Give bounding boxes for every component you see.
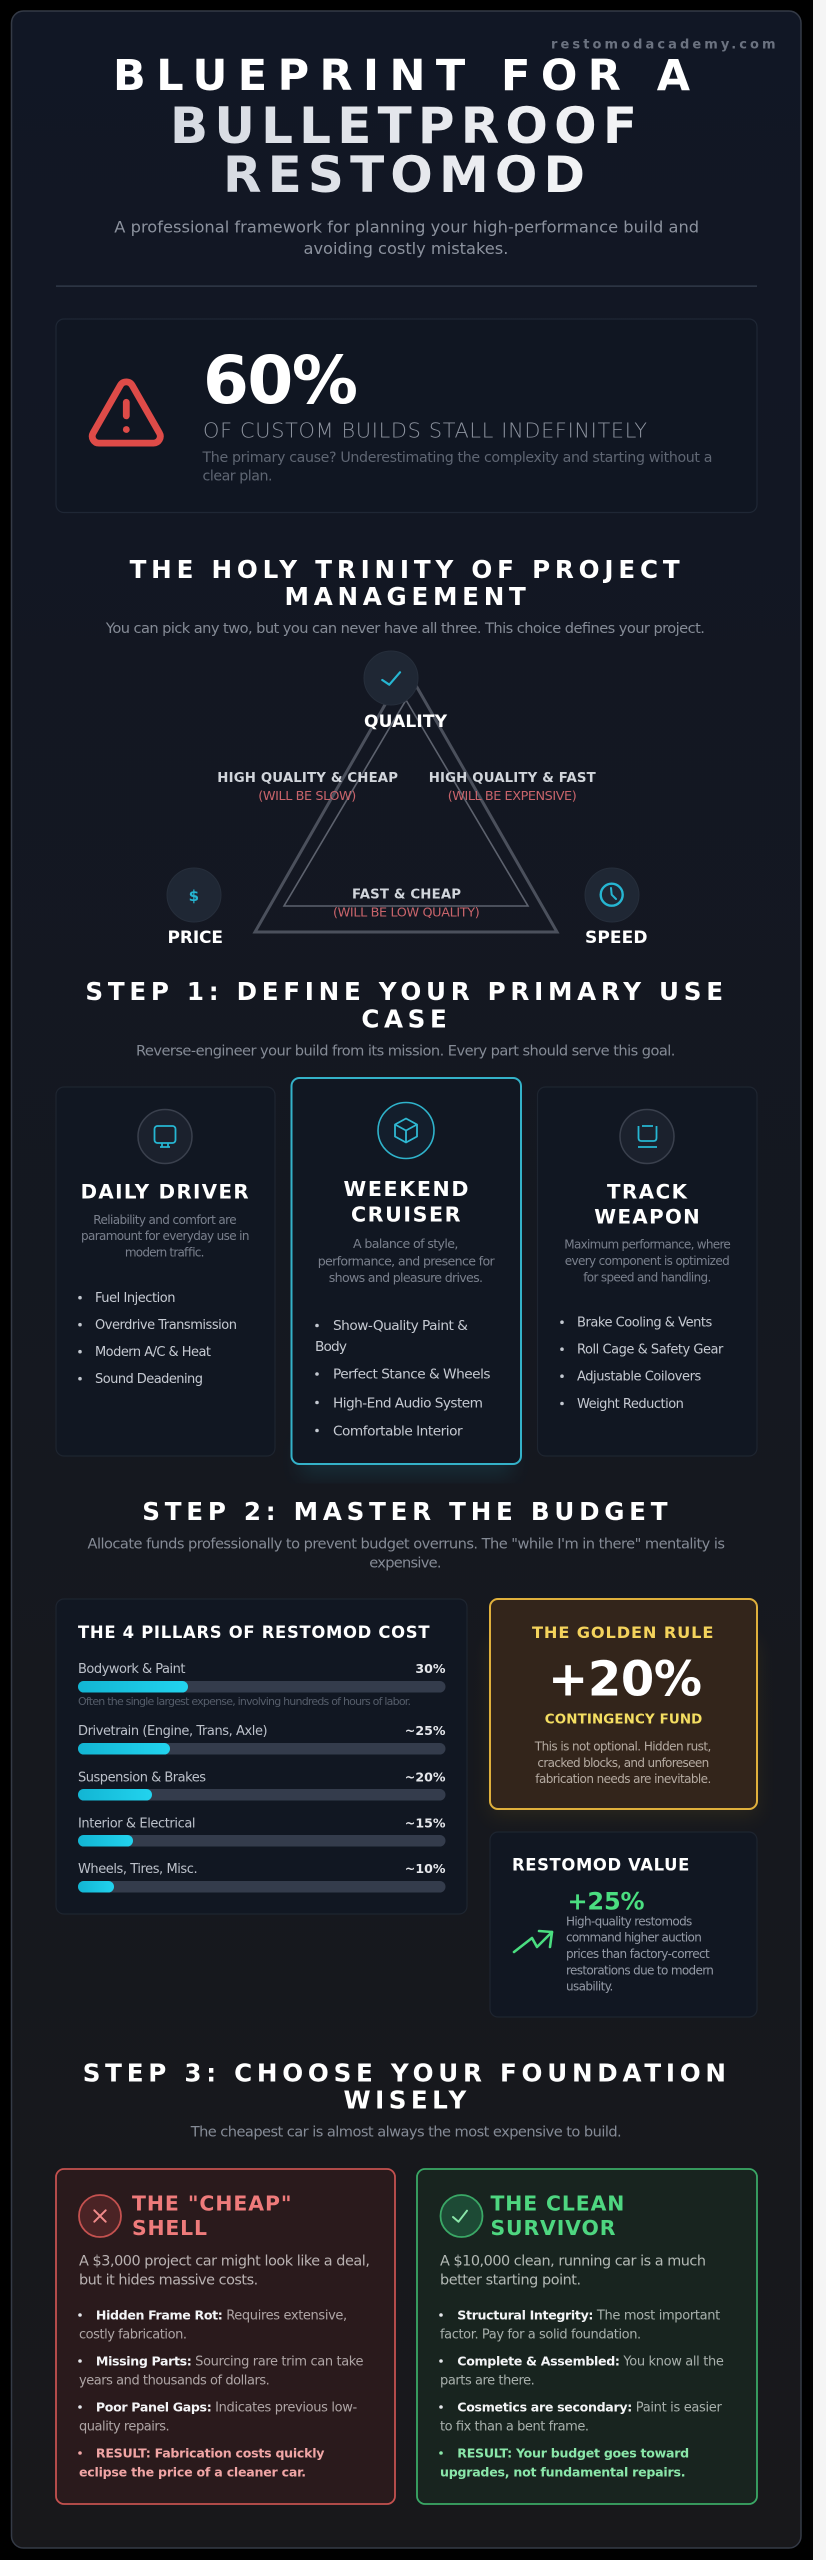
bar: bodywork: Often the single largest expense, involving hundreds of hours of labor. [78, 1695, 411, 1708]
feature list: Comfortable Interior [333, 1423, 463, 1439]
bar: bodywork: Bodywork & Paint [78, 1662, 186, 1677]
heading: step 2: STEP 2: MASTER THE BUDGET [142, 1497, 668, 1526]
panel: track weapon [538, 1087, 757, 1456]
feature list: Weight Reduction [577, 1397, 684, 1412]
bar: drivetrain: Drivetrain (Engine, Trans, Axle) [78, 1724, 268, 1739]
risk list: eclipse the price of a cleaner car. [79, 2464, 306, 2479]
chart title: THE 4 PILLARS OF RESTOMOD COST [78, 1623, 430, 1642]
title [113, 51, 691, 204]
stat headline: OF CUSTOM BUILDS STALL INDEFINITELY [203, 418, 647, 442]
benefit list: upgrades, not fundamental repairs. [440, 2464, 686, 2479]
value figure: +25% [568, 1887, 644, 1915]
feature list [78, 1291, 237, 1387]
panel: weekend cruiser [292, 1078, 521, 1464]
benefit list: to fix than a bent frame. [440, 2419, 589, 2434]
bar: wheels: Wheels, Tires, Misc. [78, 1862, 198, 1877]
risk list: Poor Panel Gaps: Indicates previous low- [96, 2399, 357, 2415]
node: quality [364, 651, 448, 732]
risk list: years and thousands of dollars. [79, 2373, 270, 2388]
benefit list [439, 2307, 724, 2479]
title: RESTOMOD [223, 146, 585, 204]
benefit list: Complete & Assembled: You know all the [457, 2353, 724, 2369]
stat description [202, 450, 712, 485]
title: WEEKEND [344, 1177, 468, 1201]
description: performance, and presence for [318, 1253, 496, 1268]
label: quality and cheap [217, 771, 398, 804]
node: speed: SPEED [585, 928, 648, 948]
label: quality and fast [429, 771, 596, 804]
trinity subtitle: You can pick any two, but you can never have all three. This choice defines your project. [105, 620, 705, 637]
description: for speed and handling. [583, 1270, 711, 1284]
bar: bodywork [78, 1661, 446, 1708]
heading: step 3: WISELY [344, 2086, 467, 2115]
label: quality and fast: (WILL BE EXPENSIVE) [448, 789, 577, 804]
risk list: quality repairs. [79, 2419, 170, 2434]
feature list [560, 1316, 724, 1412]
node: price [167, 868, 223, 948]
panel heading: THE "CHEAP" [132, 2192, 292, 2216]
panel: clean survivor [417, 2169, 757, 2504]
panel heading: SURVIVOR [490, 2216, 616, 2240]
bar: interior: Interior & Electrical [78, 1816, 196, 1832]
value heading: RESTOMOD VALUE [512, 1856, 689, 1875]
heading: holy trinity: MANAGEMENT [284, 582, 526, 611]
step 2 subtitle: expensive. [369, 1554, 442, 1572]
description: A balance of style, [353, 1236, 458, 1251]
step 1 subtitle: Reverse-engineer your build from its mission. Every part should serve this goal. [136, 1042, 675, 1060]
panel heading [132, 2192, 292, 2240]
label: fast and cheap: (WILL BE LOW QUALITY) [333, 906, 480, 921]
title: DAILY DRIVER [81, 1181, 249, 1204]
panel: golden rule [490, 1599, 757, 1809]
stat number: 60% [203, 342, 358, 419]
description: paramount for everyday use in [81, 1229, 250, 1243]
risk list: Missing Parts: Sourcing rare trim can take [96, 2353, 364, 2369]
step 2 subtitle: Allocate funds professionally to prevent budget overruns. The "while I'm in there" mentality is [88, 1536, 725, 1553]
title: BULLETPROOF [170, 97, 637, 155]
benefit list: parts are there. [440, 2373, 535, 2388]
bar: bodywork: 30% [415, 1661, 446, 1676]
label: quality and fast: HIGH QUALITY & FAST [429, 771, 596, 786]
contingency percentage: +20% [548, 1651, 702, 1707]
feature list: Body [315, 1339, 347, 1355]
title: CRUISER [351, 1203, 461, 1227]
heading: step 1: CASE [361, 1004, 447, 1033]
heading: holy trinity [130, 555, 680, 611]
bar: interior: ~15% [405, 1816, 446, 1830]
heading: step 1 [85, 977, 723, 1033]
golden rule description: fabrication needs are inevitable. [535, 1772, 711, 1786]
icon: monitor [138, 1110, 192, 1164]
feature list: Overdrive Transmission [95, 1318, 237, 1333]
golden rule heading: THE GOLDEN RULE [532, 1623, 713, 1642]
value description: High-quality restomods [566, 1914, 692, 1928]
bar: interior [78, 1816, 446, 1846]
risk list: RESULT: Fabrication costs quickly [96, 2445, 325, 2460]
inner triangle [284, 700, 528, 906]
subtitle: avoiding costly mistakes. [304, 239, 508, 258]
subtitle [114, 217, 699, 258]
feature list: Perfect Stance & Wheels [333, 1367, 490, 1383]
intro text: A $10,000 clean, running car is a much [440, 2254, 706, 2270]
golden rule description: This is not optional. Hidden rust, [534, 1740, 711, 1754]
title [594, 1181, 700, 1228]
node: speed [585, 868, 648, 948]
title: WEAPON [594, 1205, 700, 1228]
title: BLUEPRINT FOR A [113, 51, 691, 101]
bar: drivetrain: ~25% [405, 1723, 446, 1738]
panel heading: THE CLEAN [490, 2192, 624, 2216]
node: price: $ [189, 887, 199, 905]
panel: cheap shell [56, 2169, 395, 2504]
site credit: restomodacademy.com [551, 38, 776, 52]
description: Reliability and comfort are [93, 1213, 237, 1227]
feature list: Modern A/C & Heat [95, 1345, 211, 1360]
icon: track [620, 1110, 674, 1164]
description: shows and pleasure drives. [329, 1270, 483, 1285]
icon: check [440, 2195, 482, 2237]
description [318, 1236, 496, 1285]
value description: restorations due to modern [566, 1963, 714, 1977]
panel: restomod value [490, 1832, 757, 2017]
intro text: but it hides massive costs. [79, 2273, 258, 2289]
node: price: PRICE [168, 928, 223, 948]
golden rule description: cracked blocks, and unforeseen [537, 1756, 709, 1770]
panel: 60% stat [56, 319, 757, 512]
bar: suspension: Suspension & Brakes [78, 1770, 206, 1785]
benefit list: RESULT: Your budget goes toward [457, 2445, 689, 2460]
subtitle: A professional framework for planning your high-performance build and [114, 217, 699, 236]
bar: suspension: ~20% [405, 1769, 446, 1784]
feature list: Sound Deadening [95, 1372, 203, 1387]
description [564, 1238, 731, 1284]
benefit list: Structural Integrity: The most important [457, 2307, 720, 2323]
intro text: better starting point. [440, 2273, 581, 2289]
description: Maximum performance, where [564, 1238, 731, 1252]
bar: wheels: ~10% [405, 1861, 446, 1876]
feature list: Fuel Injection [95, 1291, 176, 1306]
feature list [315, 1318, 490, 1439]
feature list: High-End Audio System [333, 1395, 483, 1411]
stat description: clear plan. [202, 469, 272, 485]
label: fast and cheap [333, 888, 480, 921]
icon: cube [378, 1102, 434, 1158]
card glow [300, 1440, 512, 1476]
benefit list: Cosmetics are secondary: Paint is easier [457, 2399, 722, 2415]
icon: x [79, 2195, 121, 2237]
step 2 subtitle [88, 1536, 725, 1572]
card glow [490, 1640, 757, 1815]
description: every component is optimized [565, 1254, 730, 1268]
panel heading: SHELL [132, 2216, 207, 2240]
intro text [79, 2254, 370, 2289]
risk list: costly fabrication. [79, 2327, 187, 2342]
panel heading [490, 2192, 624, 2240]
node: quality: QUALITY [364, 712, 448, 732]
title: TRACK [607, 1181, 688, 1204]
value description [566, 1914, 714, 1994]
stat description: The primary cause? Underestimating the complexity and starting without a [202, 450, 712, 466]
feature list: Adjustable Coilovers [577, 1370, 702, 1385]
icon: warning triangle [92, 382, 160, 443]
intro text [440, 2254, 706, 2289]
outer triangle [255, 668, 557, 932]
panel: 4 pillars cost chart [56, 1599, 467, 1914]
icon: trending up arrow [514, 1931, 552, 1952]
heading: holy trinity: THE HOLY TRINITY OF PROJECT [130, 555, 680, 584]
step 3 subtitle: The cheapest car is almost always the most expensive to build. [190, 2124, 622, 2141]
golden rule description [534, 1740, 711, 1786]
bar: suspension [78, 1769, 446, 1800]
heading: step 3: STEP 3: CHOOSE YOUR FOUNDATION [83, 2059, 726, 2088]
value description: command higher auction [566, 1931, 702, 1945]
description: modern traffic. [125, 1246, 204, 1260]
bar: drivetrain [78, 1723, 446, 1754]
heading: step 3 [83, 2059, 726, 2115]
contingency label: CONTINGENCY FUND [545, 1713, 702, 1728]
risk list: Hidden Frame Rot: Requires extensive, [96, 2307, 347, 2323]
label: fast and cheap: FAST & CHEAP [352, 888, 461, 903]
benefit list: factor. Pay for a solid foundation. [440, 2327, 641, 2342]
feature list: Roll Cage & Safety Gear [577, 1343, 724, 1358]
label: quality and cheap: HIGH QUALITY & CHEAP [217, 771, 398, 786]
intro text: A $3,000 project car might look like a deal, [79, 2254, 370, 2270]
title [344, 1177, 468, 1227]
feature list: Brake Cooling & Vents [577, 1316, 713, 1331]
triangle diagram [167, 651, 648, 948]
value description: prices than factory-correct [566, 1947, 710, 1961]
value description: usability. [566, 1980, 613, 1994]
label: quality and cheap: (WILL BE SLOW) [258, 789, 356, 804]
feature list: Show-Quality Paint & [333, 1318, 468, 1334]
panel: daily driver [56, 1087, 275, 1456]
risk list [78, 2307, 363, 2479]
heading: step 1: STEP 1: DEFINE YOUR PRIMARY USE [85, 977, 723, 1006]
description [81, 1213, 250, 1260]
bar: wheels [78, 1861, 446, 1892]
